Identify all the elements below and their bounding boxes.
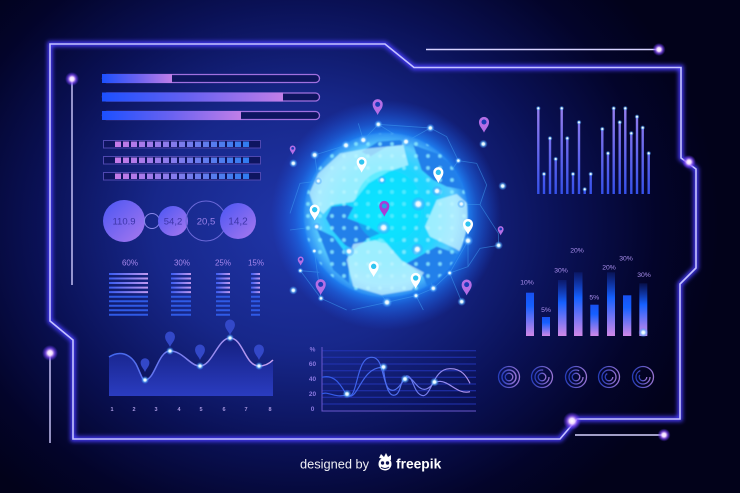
bottom right connector stick (575, 428, 670, 442)
globe (271, 99, 507, 330)
multi line chart: 60 (309, 361, 316, 368)
dot grid (303, 133, 470, 297)
striped percentage columns (109, 258, 264, 315)
multi line chart: 0 (311, 406, 315, 413)
column bar chart: 30% (554, 268, 568, 274)
land: africa (425, 194, 468, 257)
area line chart: 4 (177, 407, 181, 413)
column bar chart: 5% (589, 294, 599, 302)
footer credit: designed by (300, 456, 370, 472)
vertical line chart (536, 106, 651, 194)
icon: freepik mascot (378, 453, 392, 470)
multi line chart: 40 (309, 376, 316, 383)
area line chart: 6 (222, 407, 226, 413)
area line chart (109, 320, 273, 413)
striped percentage columns: 60% (122, 258, 138, 268)
left lower connector stick (42, 345, 58, 443)
footer credit: freepik (396, 456, 442, 472)
neon corner glow bottom (563, 412, 581, 430)
dark ocean patches (317, 140, 470, 293)
striped percentage columns: 25% (215, 258, 231, 268)
globe halo (271, 100, 501, 330)
left upper connector stick (65, 72, 79, 285)
earth sphere (303, 133, 470, 297)
column bar chart: 5% (541, 307, 551, 314)
progress bars (102, 74, 320, 120)
bubble values (103, 200, 256, 242)
neon frame (50, 44, 696, 439)
column bar chart: 20% (602, 264, 616, 272)
striped percentage columns: 30% (174, 258, 190, 268)
top right connector stick (426, 43, 666, 56)
column bar chart: 20% (570, 248, 584, 254)
column bar chart: 10% (520, 280, 534, 286)
area line chart: 8 (268, 407, 272, 413)
multi line chart: 20 (309, 391, 316, 398)
concentric ring gauges (498, 366, 654, 388)
purple map pins (290, 99, 504, 295)
bubble values: 110.9 (112, 216, 136, 228)
land: north america (309, 145, 408, 214)
bubble values: 54,2 (164, 216, 182, 228)
area line chart: 1 (110, 407, 114, 413)
column bar chart (520, 248, 651, 338)
area line chart: 5 (199, 407, 203, 413)
bubble values: 20,5 (197, 216, 215, 228)
network nodes (289, 120, 507, 308)
multi line chart: % (310, 346, 316, 354)
area line chart: 2 (132, 407, 136, 413)
area line chart: 3 (154, 407, 158, 413)
column bar chart: 30% (637, 272, 651, 279)
network lines (290, 123, 499, 310)
striped percentage columns: 15% (248, 258, 264, 268)
footer credit (300, 453, 442, 472)
segmented bars (104, 140, 260, 180)
column bar chart: 30% (619, 256, 633, 262)
white map pins (310, 157, 473, 289)
land: south america (347, 239, 424, 295)
Caribbean dark region (326, 205, 380, 250)
center brightness (355, 170, 422, 243)
bubble values: 14,2 (228, 216, 248, 228)
multi line chart (309, 346, 476, 413)
area line chart: 7 (244, 407, 248, 413)
